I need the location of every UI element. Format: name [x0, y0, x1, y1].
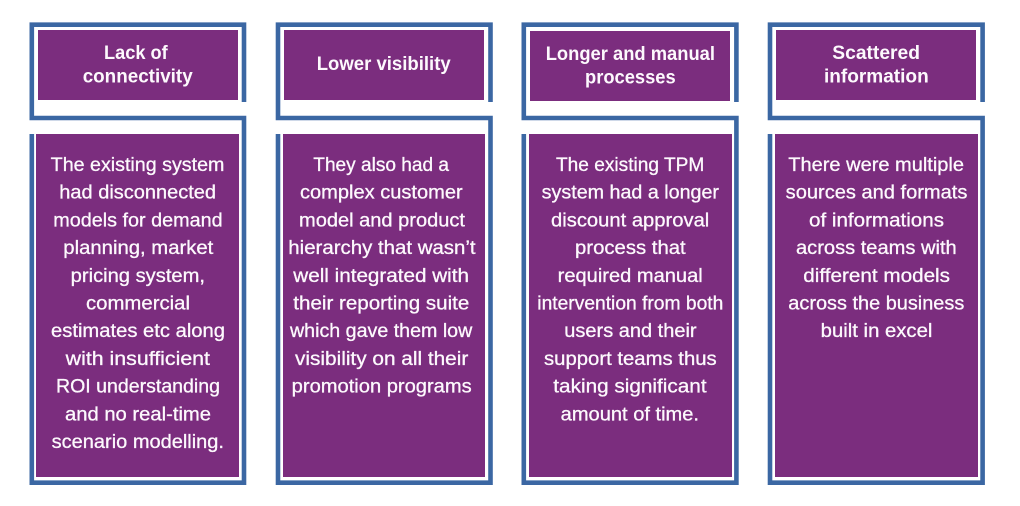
text block: lack of connectivity description: scenario modelling.: [52, 432, 224, 453]
text block: lower visibility description: promotion programs: [292, 377, 472, 398]
text block: lack of connectivity description: ROI understanding: [56, 377, 220, 398]
text block: longer and manual processes description: users and their: [564, 321, 697, 342]
text block: longer and manual processes description: taking significant: [553, 377, 707, 398]
text block: lack of connectivity description: had disconnected: [59, 183, 216, 204]
text block: lack of connectivity description: [36, 134, 239, 477]
text block: longer and manual processes description: [529, 134, 732, 477]
text block: lack of connectivity description: and no real-time: [65, 404, 211, 425]
heading: lower visibility: Lower visibility: [317, 54, 451, 75]
text block: longer and manual processes description: amount of time.: [561, 404, 699, 425]
panel: scattered information: [770, 25, 983, 483]
text block: scattered information description: There were multiple: [788, 155, 964, 176]
heading: lack of connectivity: connectivity: [83, 66, 193, 87]
text block: lower visibility description: visibility on all their: [295, 349, 469, 370]
heading: lower visibility: [284, 30, 484, 100]
text block: longer and manual processes description: required manual: [558, 266, 703, 287]
text block: lower visibility description: which gave them low: [289, 321, 473, 342]
heading: scattered information: information: [824, 66, 929, 87]
text block: lower visibility description: well integrated with: [292, 266, 469, 287]
heading: longer and manual processes: Longer and manual: [546, 44, 715, 65]
text block: lack of connectivity description: with insufficient: [65, 349, 211, 370]
text block: scattered information description: across the business: [788, 294, 964, 314]
text block: lack of connectivity description: commercial: [86, 294, 190, 314]
text block: scattered information description: [775, 134, 978, 477]
text block: scattered information description: built in excel: [821, 321, 932, 342]
text block: scattered information description: sources and formats: [786, 183, 967, 204]
text block: lower visibility description: their reporting suite: [293, 294, 469, 314]
text block: lower visibility description: model and product: [299, 210, 466, 231]
heading: lack of connectivity: [38, 30, 238, 100]
heading: longer and manual processes: processes: [585, 67, 676, 88]
text block: lower visibility description: complex customer: [300, 183, 463, 204]
text block: lack of connectivity description: The existing system: [51, 155, 224, 176]
frame: column 2 outline: [278, 25, 490, 483]
panel: lack of connectivity: [32, 25, 244, 483]
text block: longer and manual processes description: support teams thus: [544, 349, 717, 370]
text block: lower visibility description: hierarchy that wasn’t: [288, 238, 476, 259]
text block: longer and manual processes description: process that: [575, 238, 686, 259]
text block: lack of connectivity description: models for demand: [53, 210, 223, 231]
text block: lower visibility description: They also had a: [313, 155, 449, 176]
text block: lack of connectivity description: pricing system,: [71, 266, 205, 287]
text block: lack of connectivity description: estimates etc along: [51, 321, 225, 342]
heading: lack of connectivity: Lack of: [104, 43, 168, 64]
text block: longer and manual processes description: system had a longer: [542, 183, 720, 204]
heading: longer and manual processes: [530, 31, 730, 101]
text block: scattered information description: across teams with: [796, 238, 957, 259]
heading: scattered information: Scattered: [832, 43, 920, 64]
text block: lower visibility description: [283, 134, 485, 477]
panel: longer and manual processes: [524, 25, 736, 483]
text block: scattered information description: of informations: [809, 210, 944, 231]
panel: lower visibility: [278, 25, 490, 483]
text block: lack of connectivity description: planning, market: [63, 238, 214, 259]
heading: scattered information: [776, 30, 976, 100]
text block: longer and manual processes description: discount approval: [551, 210, 709, 231]
frame: column 4 outline: [770, 25, 983, 483]
text block: scattered information description: different models: [803, 266, 950, 287]
frame: column 3 outline: [524, 25, 736, 483]
text block: longer and manual processes description: intervention from both: [537, 294, 723, 314]
frame: column 1 outline: [32, 25, 244, 483]
text block: longer and manual processes description: The existing TPM: [556, 155, 704, 176]
